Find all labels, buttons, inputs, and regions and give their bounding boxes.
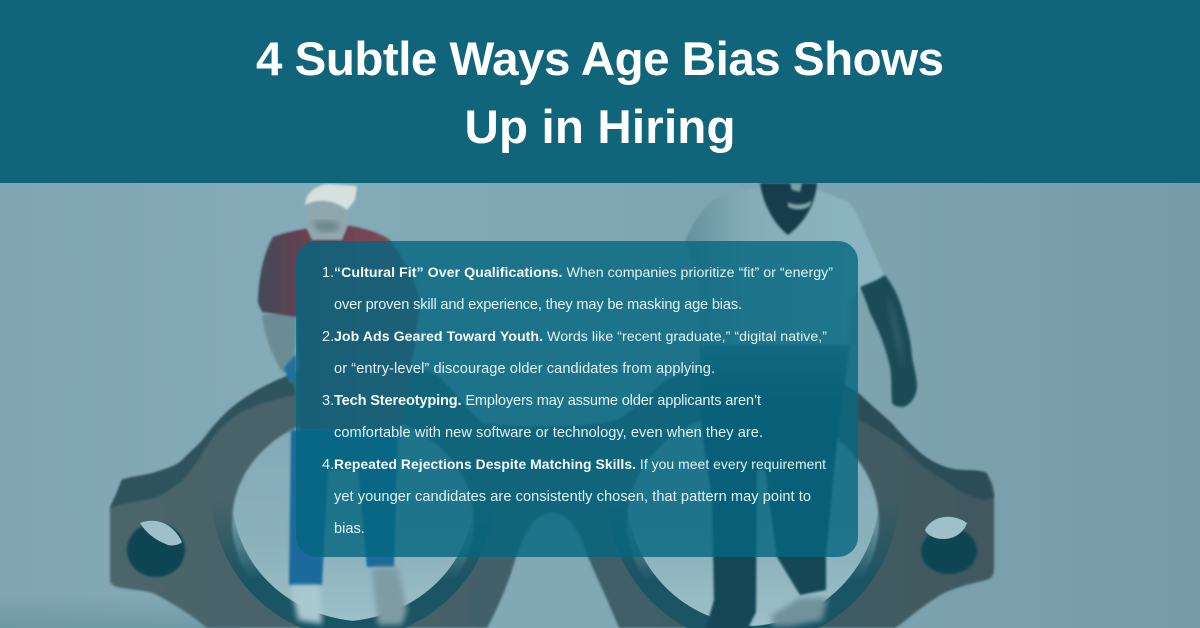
list item 2: 2. [322,329,334,345]
list item 4: Repeated Rejections Despite Matching Skills. If you meet every requirement [334,456,826,472]
icon: right hinge hole [921,517,977,574]
list item 1 [322,265,833,313]
list item 3 [322,393,763,441]
title: 4 Subtle Ways Age Bias Shows [256,33,944,86]
list item 3: comfortable with new software or technology, even when they are. [334,425,763,441]
list item 3: 3. [322,393,334,409]
list item 2: Job Ads Geared Toward Youth. Words like “recent graduate,” “digital native,” [334,329,827,345]
list item 4: yet younger candidates are consistently chosen, that pattern may point to [334,489,811,505]
figure: younger man [685,183,917,628]
list item 2: or “entry-level” discourage older candidates from applying. [334,361,715,377]
list item 1: 1. [322,265,334,281]
lens shadow crescents [222,500,889,628]
title: Up in Hiring [464,101,736,154]
list item 3: Tech Stereotyping. Employers may assume older applicants aren’t [334,393,761,409]
top ridge right [858,393,994,500]
list item 4 [322,456,826,537]
figure: older man [258,184,420,625]
list item 4: 4. [322,457,334,473]
icon: left hinge hole [127,521,185,577]
panel: text card [296,241,858,557]
list item 2 [322,329,827,377]
header band with title [0,0,1200,183]
list item 1: over proven skill and experience, they may be masking age bias. [334,297,742,313]
top ridge left [110,375,296,508]
icon: glasses frame [110,360,994,628]
list item 4: bias. [334,521,365,537]
list item 1: “Cultural Fit” Over Qualifications. When companies prioritize “fit” or “energy” [334,265,833,281]
title [256,33,944,154]
